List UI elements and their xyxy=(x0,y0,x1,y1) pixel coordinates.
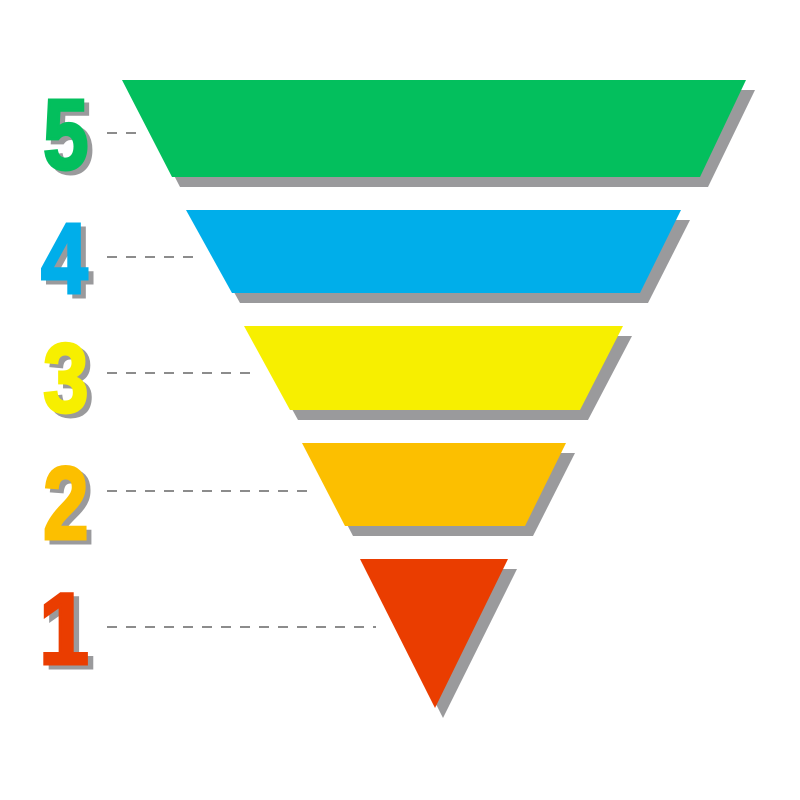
number 2: 2 xyxy=(43,445,89,561)
number 2: 2 xyxy=(48,449,94,565)
number 4: 4 xyxy=(41,202,88,315)
funnel layer 5 green xyxy=(122,80,755,187)
funnel layer 4 blue xyxy=(186,210,690,303)
number 5: 5 xyxy=(43,79,89,191)
number 4: 4 xyxy=(46,206,93,319)
number 1: 1 xyxy=(39,573,89,686)
number 5: 5 xyxy=(48,83,94,195)
funnel layer 3 yellow xyxy=(244,326,632,420)
funnel layer 1 red triangle xyxy=(360,559,517,718)
number 3: 3 xyxy=(48,328,94,438)
dashed leader lines xyxy=(107,133,376,627)
number 1: 1 xyxy=(44,577,94,690)
number 3: 3 xyxy=(43,324,89,434)
funnel layer 2 orange xyxy=(302,443,575,536)
